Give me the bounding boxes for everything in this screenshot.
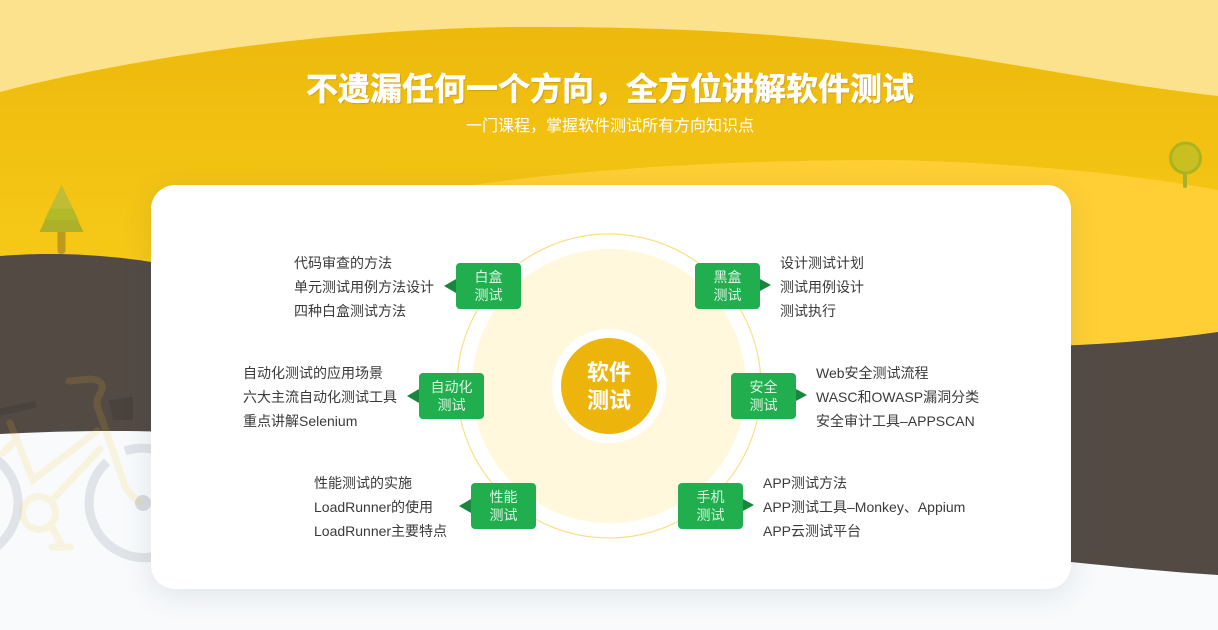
automation list [243,365,397,429]
arrow: mobile [743,499,754,511]
automation list: 六大主流自动化测试工具 [243,389,397,405]
white box tag: 测试 [474,287,502,303]
icon: pine tree [40,185,84,254]
arrow: white box [444,279,456,293]
performance list: LoadRunner的使用 [314,499,433,515]
automation tag: 自动化 [430,379,472,395]
light yellow hill [440,160,1218,630]
performance tag: 测试 [490,507,518,523]
white box list: 单元测试用例方法设计 [294,279,434,295]
security list: Web安全测试流程 [816,365,929,381]
performance list: LoadRunner主要特点 [314,523,447,539]
black box tag: 黑盒 [714,269,742,285]
white box tag: 白盒 [474,269,502,285]
center badge: 软件 [587,360,631,385]
performance tag [471,483,536,529]
center badge: 测试 [587,388,631,413]
concentric circles [457,233,761,539]
white box list: 四种白盒测试方法 [294,303,406,319]
security list: 安全审计工具–APPSCAN [816,413,975,429]
black box tag [695,263,760,309]
black box tag: 测试 [714,287,742,303]
security tag [731,373,796,419]
left brown hill [0,254,300,630]
arrow: automation [407,389,419,403]
black box list: 设计测试计划 [780,255,864,271]
security list [816,365,979,429]
mobile list [763,475,965,539]
performance list: 性能测试的实施 [314,475,412,491]
mobile list: APP测试方法 [763,475,847,491]
performance list [314,475,447,539]
mobile tag [678,483,743,529]
white box tag [456,263,521,309]
black box list [780,255,864,319]
arrow: performance [459,499,471,513]
performance tag: 性能 [490,489,518,505]
security tag: 安全 [750,379,778,395]
panel: test directions card [151,185,1071,589]
arrow: security [796,389,807,401]
subtitle: 一门课程，掌握软件测试所有方向知识点 [466,118,754,135]
mobile tag: 手机 [696,489,724,505]
center badge [561,338,657,434]
automation list: 自动化测试的应用场景 [243,365,383,381]
mobile list: APP云测试平台 [763,523,861,539]
automation tag [419,373,484,419]
automation tag: 测试 [438,397,466,413]
icon: round tree [1170,143,1200,188]
ground [0,431,1218,630]
title: 不遗漏任何一个方向，全方位讲解软件测试 [306,71,914,107]
security tag: 测试 [750,397,778,413]
black box list: 测试执行 [780,303,836,319]
mobile tag: 测试 [696,507,724,523]
white box list [294,255,434,319]
automation list: 重点讲解Selenium [243,413,357,429]
right brown hill [900,332,1218,630]
icon: bicycle [0,379,152,558]
black box list: 测试用例设计 [780,279,864,295]
arrow: black box [760,279,771,291]
mobile list: APP测试工具–Monkey、Appium [763,499,965,515]
security list: WASC和OWASP漏洞分类 [816,389,979,405]
white box list: 代码审查的方法 [294,255,392,271]
